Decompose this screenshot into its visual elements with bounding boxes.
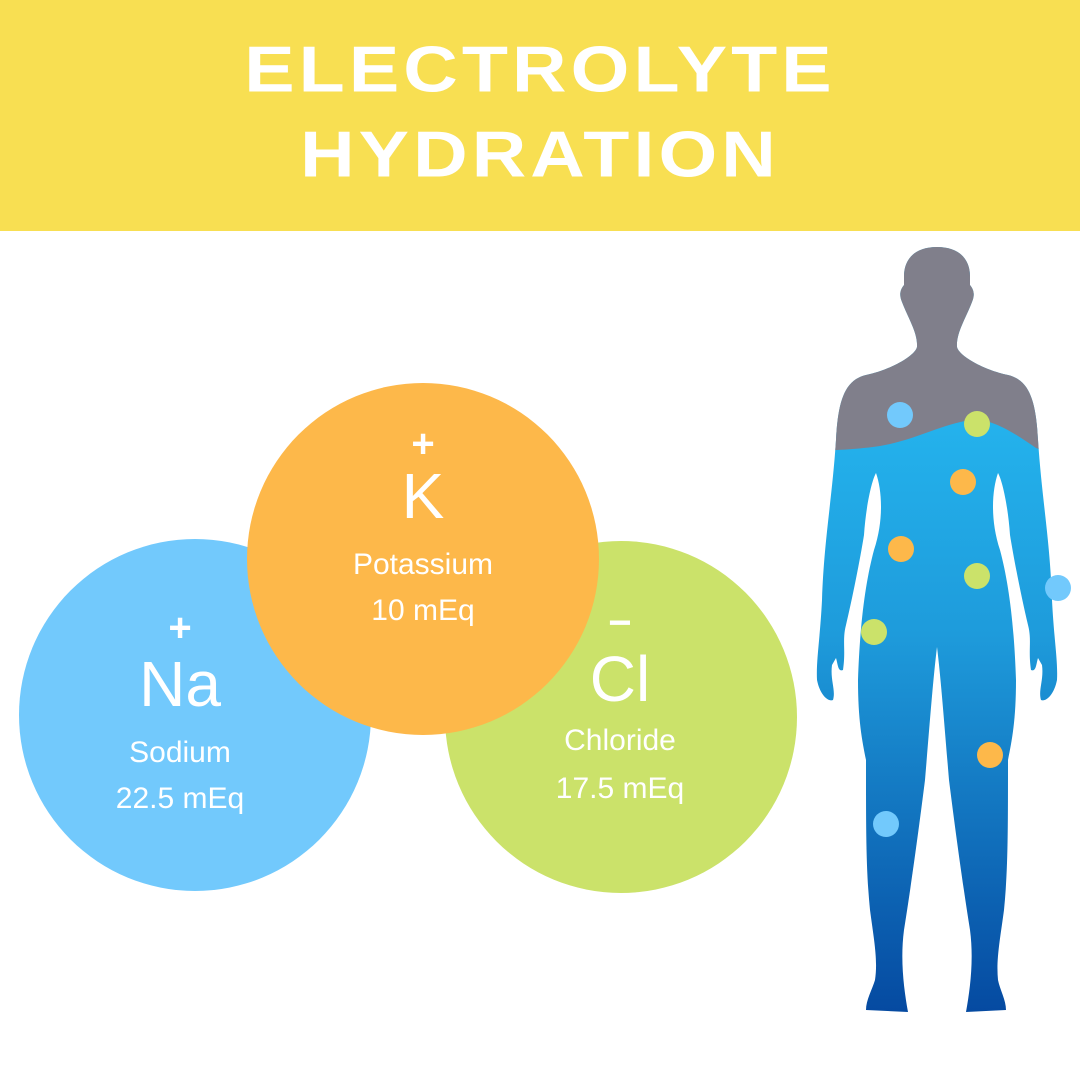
circle: sodium	[19, 539, 371, 891]
circle: potassium	[247, 383, 599, 735]
header band	[0, 0, 1080, 231]
text: sodium: Sodium	[129, 736, 231, 769]
text: potassium: 10 mEq	[371, 594, 475, 627]
text: chloride	[556, 601, 684, 805]
text: potassium	[353, 422, 493, 627]
text: chloride: 17.5 mEq	[556, 772, 684, 805]
text: potassium: Potassium	[353, 548, 493, 581]
text: chloride: Chloride	[564, 724, 676, 757]
body silhouette	[816, 247, 1071, 1012]
text: chloride: Cl	[590, 643, 650, 715]
text: chloride: −	[608, 601, 632, 645]
dots: electrolytes	[861, 402, 1071, 837]
text: sodium	[116, 606, 244, 815]
title line 1: ELECTROLYTE	[244, 33, 836, 106]
text: sodium: Na	[139, 648, 221, 720]
text: sodium: +	[168, 606, 192, 650]
circle: chloride	[445, 541, 797, 893]
text: sodium: 22.5 mEq	[116, 782, 244, 815]
text: potassium: K	[402, 460, 444, 532]
title line 2: HYDRATION	[300, 118, 780, 191]
text: potassium: +	[411, 422, 435, 466]
